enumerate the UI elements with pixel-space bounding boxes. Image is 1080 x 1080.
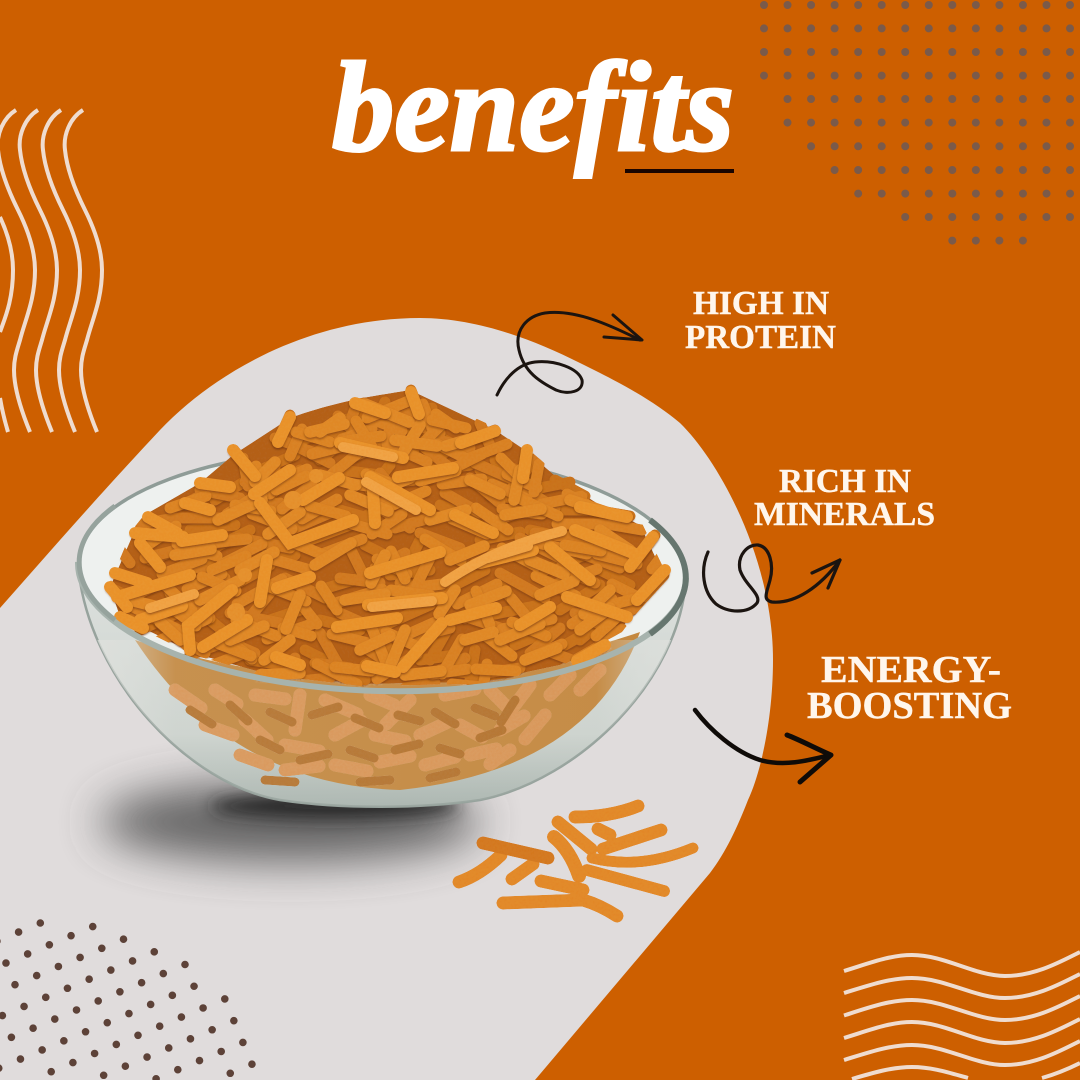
label: high in protein: PROTEIN — [685, 319, 836, 356]
arrow: rich in minerals — [704, 545, 840, 611]
wavy lines: top left — [0, 110, 102, 432]
label: high in protein: HIGH IN — [693, 285, 829, 322]
wavy lines: bottom right — [844, 952, 1080, 1079]
title underline — [625, 169, 734, 173]
light grey blob panel — [0, 318, 773, 1080]
rim side highlights — [650, 520, 686, 634]
bowl inner wall and back rim — [76, 441, 688, 699]
snack seen through the glass — [98, 632, 671, 790]
arrow: high in protein — [497, 312, 642, 395]
small round pieces — [227, 469, 323, 621]
bowl shadow — [100, 782, 480, 862]
snack pile — [106, 390, 676, 694]
bowl of snack — [76, 390, 688, 810]
loose snack pieces — [459, 806, 693, 916]
label: rich in minerals: MINERALS — [754, 496, 935, 533]
label: energy boosting: ENERGY- — [821, 649, 1001, 691]
dot pattern: bottom left — [0, 923, 252, 1079]
label: rich in minerals: RICH IN — [779, 463, 911, 500]
label: energy boosting: BOOSTING — [807, 685, 1012, 727]
label: energy boosting — [807, 649, 1012, 727]
front rim — [78, 562, 686, 691]
title: benefits — [332, 36, 734, 178]
label: high in protein — [685, 285, 836, 356]
bowl glass body — [78, 565, 686, 807]
label: rich in minerals — [754, 463, 935, 533]
dot pattern: top right — [764, 5, 1072, 241]
arrow: energy boosting — [695, 710, 831, 782]
